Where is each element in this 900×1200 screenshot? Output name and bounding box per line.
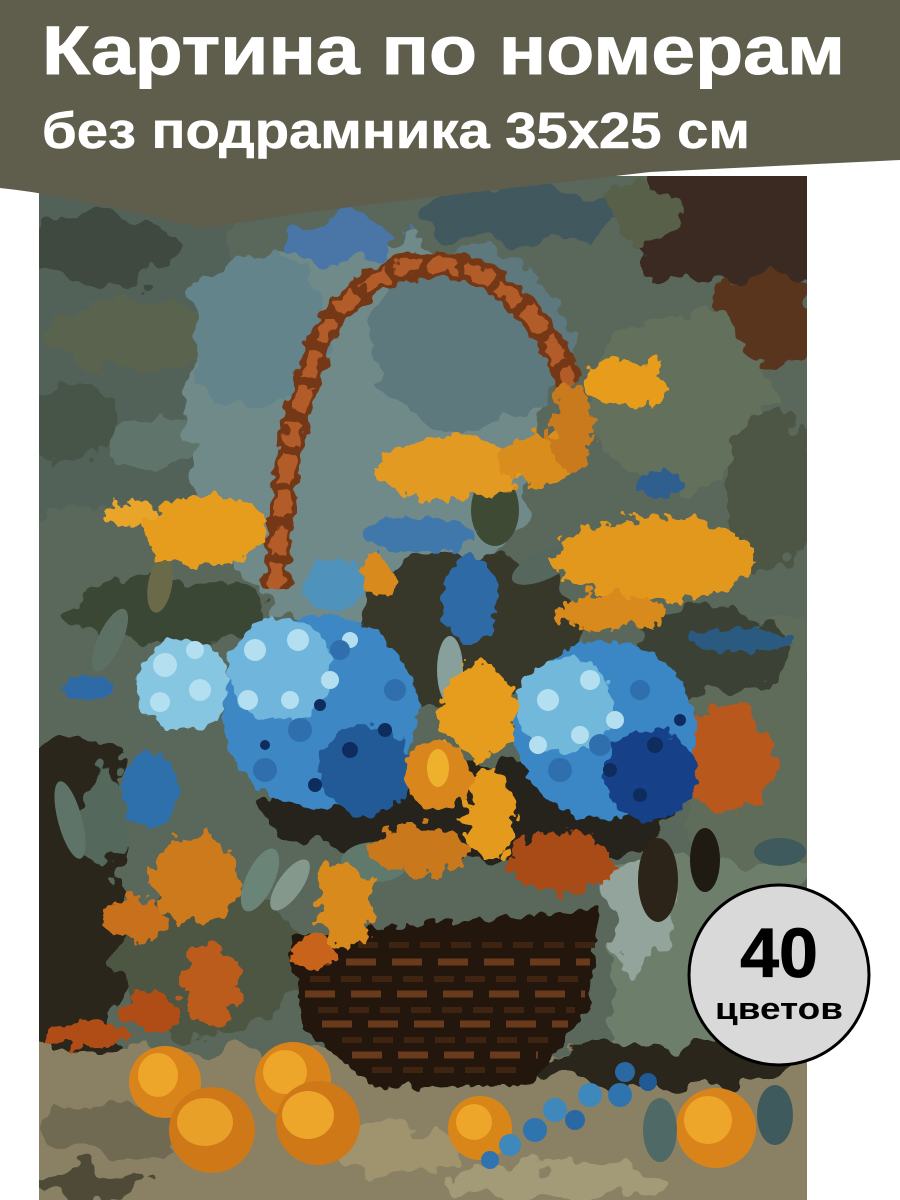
badge: 40 colours [689, 885, 869, 1065]
central orange [404, 741, 472, 809]
oranges on the table [129, 1042, 756, 1173]
dark foliage [70, 550, 780, 865]
header banner [0, 0, 900, 229]
basket body [288, 910, 598, 1088]
badge: 40 colours: 40 [740, 914, 818, 992]
title: Картина по номерам [42, 12, 845, 89]
painting: flower basket still life [10, 165, 820, 1200]
badge: 40 colours: цветов [715, 991, 843, 1026]
blue hydrangeas [137, 615, 696, 821]
orange mimosa sprays [43, 358, 774, 1047]
basket handle [275, 264, 570, 590]
leaves [48, 474, 806, 922]
subtitle: без подрамника 35х25 см [42, 102, 750, 159]
small blue berry sprays [62, 471, 792, 828]
painting background blotches [10, 165, 820, 1200]
hydrangea petal details [150, 629, 624, 754]
blue berries on the table [481, 1062, 793, 1169]
